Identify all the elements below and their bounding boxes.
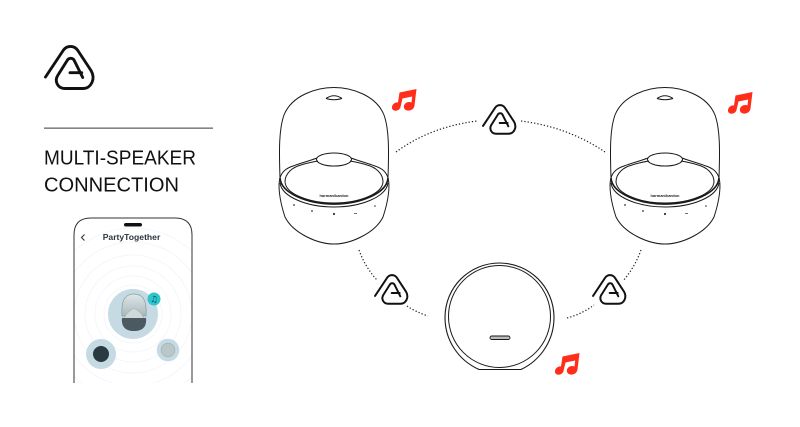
icon: red music note, bottom (555, 353, 580, 375)
speaker: left (279, 88, 389, 244)
phone app mockup (74, 218, 192, 383)
icon: link logo, top (483, 105, 515, 134)
icon: link logo, bottom left (375, 275, 407, 304)
music badge: ♫ (150, 295, 158, 305)
music badge (148, 292, 160, 306)
icon: red music note, left (392, 89, 416, 111)
title: CONNECTION (44, 174, 179, 196)
icon: red music note, right (728, 92, 752, 114)
phone app mockup: PartyTogether (103, 232, 161, 242)
title: MULTI-SPEAKER (44, 148, 196, 170)
speaker: right (610, 88, 720, 244)
main speaker bubble (108, 289, 158, 339)
icon: link logo, bottom right (593, 275, 625, 304)
icon: brand logo (46, 46, 93, 88)
dotted connection lines (359, 121, 641, 318)
title divider (44, 128, 213, 129)
light speaker bubble (157, 339, 179, 361)
speaker: bottom centre (445, 263, 554, 370)
dark speaker bubble (86, 339, 116, 369)
